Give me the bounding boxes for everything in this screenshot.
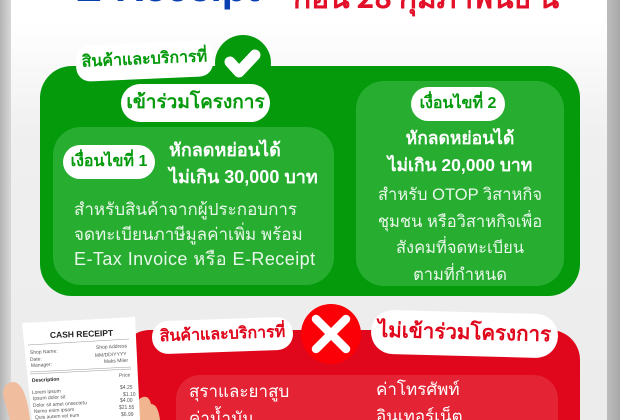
illustration: hand holding receipt: $21.55	[119, 405, 135, 411]
label pill: not participating: ไม่เข้าร่วมโครงการ	[378, 319, 551, 346]
pill: condition 2	[411, 87, 505, 121]
illustration: hand holding receipt: Price	[119, 372, 131, 379]
deduction limit 1	[167, 139, 318, 187]
deduction limit 2: ไม่เกิน 20,000 บาท	[388, 155, 532, 175]
condition 1 description	[74, 200, 316, 269]
illustration: hand holding receipt: Shop Address	[96, 343, 128, 351]
pill: condition 1: เงื่อนไขที่ 1	[71, 153, 147, 170]
illustration: hand holding receipt: Manager:	[31, 362, 52, 369]
excluded items left	[189, 382, 289, 420]
deduction limit 2: หักลดหย่อนได้	[406, 128, 514, 148]
side shadow right	[607, 0, 620, 420]
deduction limit 1: หักลดหย่อนได้	[169, 140, 281, 160]
condition 2 description: ชุมชน หรือวิสาหกิจเพื่อ	[378, 212, 542, 230]
illustration: hand holding receipt: Dolor sit amet onsectetu	[33, 400, 87, 409]
illustration: hand holding receipt: Date:	[30, 356, 42, 363]
label pill: goods and services excluded	[151, 317, 294, 354]
illustration: hand holding receipt: CASH RECEIPT	[50, 328, 114, 340]
panel: condition 2	[356, 81, 564, 286]
condition 1 description: E-Tax Invoice หรือ E-Receipt	[74, 249, 316, 269]
illustration: hand holding receipt: MM/DD/YYYY	[95, 351, 127, 359]
excluded items right	[376, 380, 463, 420]
illustration: hand holding receipt: Lorem ipsum	[32, 388, 61, 396]
panel: participating goods	[40, 66, 580, 296]
illustration: hand holding receipt: $4.25	[120, 385, 133, 391]
label pill: participating: เข้าร่วมโครงการ	[126, 92, 265, 113]
panel: condition 1	[53, 127, 334, 285]
illustration: hand holding receipt: Maks Miler	[104, 358, 129, 365]
illustration: hand holding receipt	[3, 317, 160, 420]
condition 1 description: สำหรับสินค้าจากผู้ประกอบการ	[74, 200, 297, 219]
deduction limit 2	[386, 128, 532, 175]
illustration: hand holding receipt: Ipsum dolor sit	[33, 394, 66, 402]
panel: excluded list	[176, 375, 558, 420]
pill: condition 2: เงื่อนไขที่ 2	[420, 95, 496, 112]
side shadow left	[0, 0, 11, 420]
panel: excluded goods	[120, 330, 580, 420]
excluded items left: สุราและยาสูบ	[189, 382, 289, 401]
illustration: hand holding receipt: Shop Name:	[30, 349, 58, 356]
pill: condition 1	[63, 145, 155, 179]
condition 2 description	[378, 186, 542, 284]
label pill: goods and services: สินค้าและบริการที่	[81, 48, 208, 71]
label pill: participating	[121, 84, 270, 122]
illustration: hand holding receipt: Description	[32, 377, 60, 384]
condition 2 description: ตามที่กำหนด	[413, 266, 507, 284]
label pill: not participating	[370, 310, 559, 358]
label pill: goods and services excluded: สินค้าและบริการที่	[159, 324, 286, 345]
icon: cross circle	[301, 304, 361, 364]
icon: check circle	[215, 35, 271, 78]
deduction limit 1: ไม่เกิน 30,000 บาท	[169, 167, 318, 187]
illustration: hand holding receipt: Nemo enim ipsam	[34, 407, 74, 415]
illustration: hand holding receipt: $6.99	[121, 412, 134, 418]
condition 2 description: สังคมที่จดทะเบียน	[396, 239, 524, 257]
label pill: goods and services	[75, 40, 214, 82]
illustration: hand holding receipt: $4.00	[120, 398, 133, 404]
excluded items right: ค่าโทรศัพท์	[376, 380, 460, 399]
illustration: hand holding receipt: $1.10	[123, 392, 136, 398]
condition 2 description: สำหรับ OTOP วิสาหกิจ	[378, 186, 542, 204]
condition 1 description: จดทะเบียนภาษีมูลค่าเพิ่ม พร้อม	[74, 224, 303, 244]
